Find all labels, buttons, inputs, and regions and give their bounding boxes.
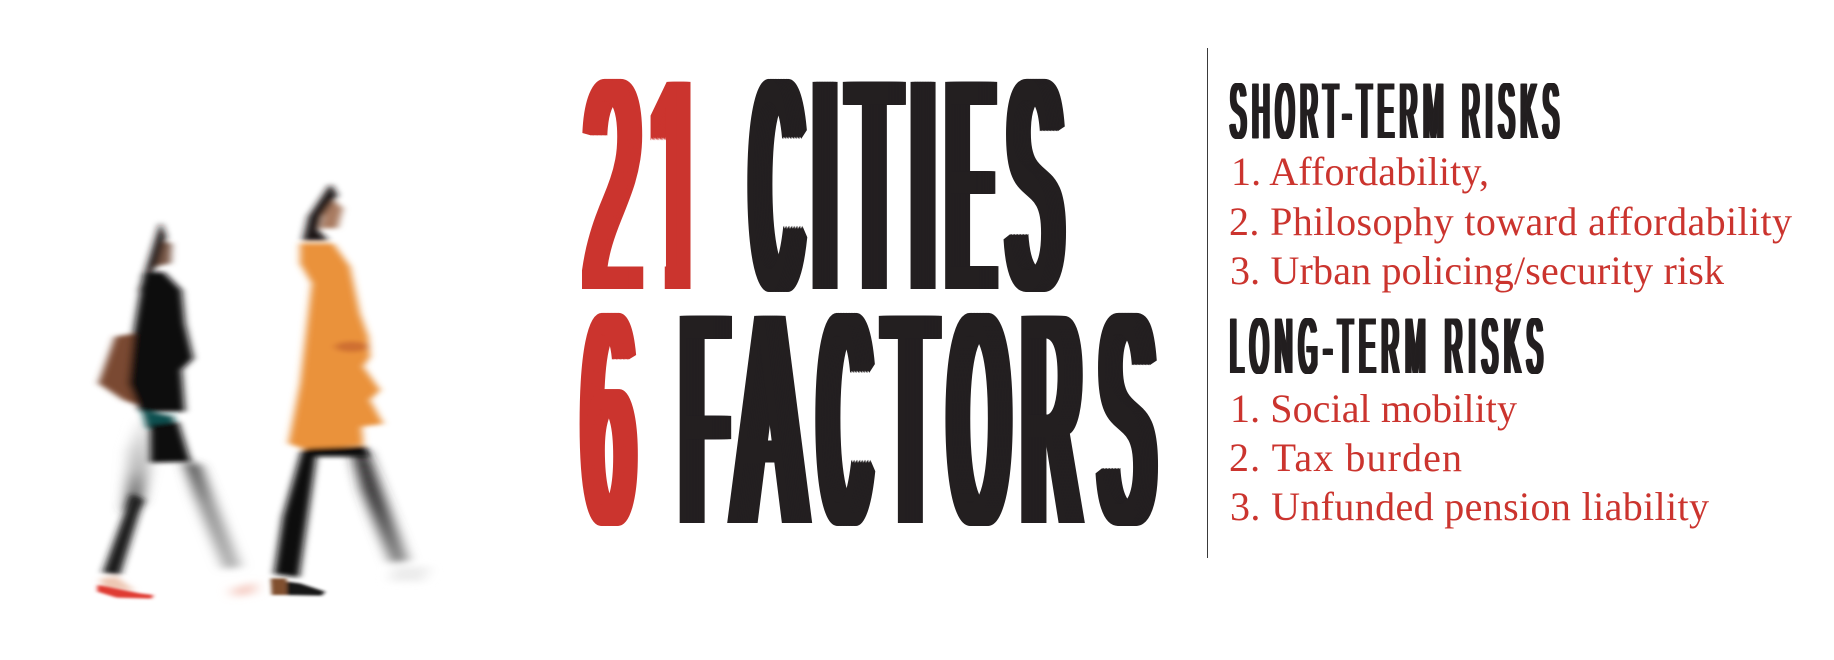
headline: 6 factors: 6: [575, 251, 625, 587]
list: short-term risks: 1. Affordability,: [1231, 149, 1489, 194]
headline: 6 factors: A: [727, 251, 791, 587]
list: long-term risks: [1229, 386, 1709, 529]
figure: person in orange coat: [271, 183, 430, 596]
list: short-term risks: 2. Philosophy toward affordability: [1229, 199, 1792, 244]
headline: 6 factors: S: [1092, 251, 1143, 587]
headline: 21 cities: T: [841, 17, 890, 353]
headline: 6 factors: C: [812, 251, 859, 587]
headline: 21 cities: 1: [641, 17, 696, 353]
headline: 21 cities: I: [807, 17, 824, 353]
headline: 21 cities: [577, 17, 1066, 353]
photo: two blurred people walking: [92, 182, 428, 600]
heading: long-term risks: LONG-TERM RISKS: [1228, 301, 1547, 390]
heading: short-term risks: SHORT-TERM RISKS: [1228, 66, 1563, 155]
list: long-term risks: 1. Social mobility: [1230, 386, 1517, 431]
number: 21: [577, 17, 690, 353]
headline: 21 cities: E: [940, 17, 982, 353]
headline: 21 cities: I: [905, 17, 922, 353]
vertical divider: [1207, 48, 1208, 558]
headline: 6 factors: O: [942, 251, 998, 587]
word: factors: [674, 251, 1158, 587]
headline: 21 cities: C: [744, 17, 791, 353]
headline: 6 factors: T: [877, 251, 926, 587]
figure: woman in black coat: [97, 222, 257, 599]
headline: 6 factors: R: [1015, 251, 1070, 587]
list: long-term risks: 2. Tax burden: [1229, 435, 1462, 480]
list: short-term risks: [1229, 149, 1792, 293]
headline: 6 factors: F: [674, 251, 717, 587]
word: cities: [744, 17, 1066, 353]
headline: 21 cities: 2: [577, 17, 632, 353]
list: long-term risks: 3. Unfunded pension liability: [1230, 484, 1709, 529]
headline: 21 cities: S: [1000, 17, 1051, 353]
list: short-term risks: 3. Urban policing/security risk: [1230, 248, 1724, 293]
